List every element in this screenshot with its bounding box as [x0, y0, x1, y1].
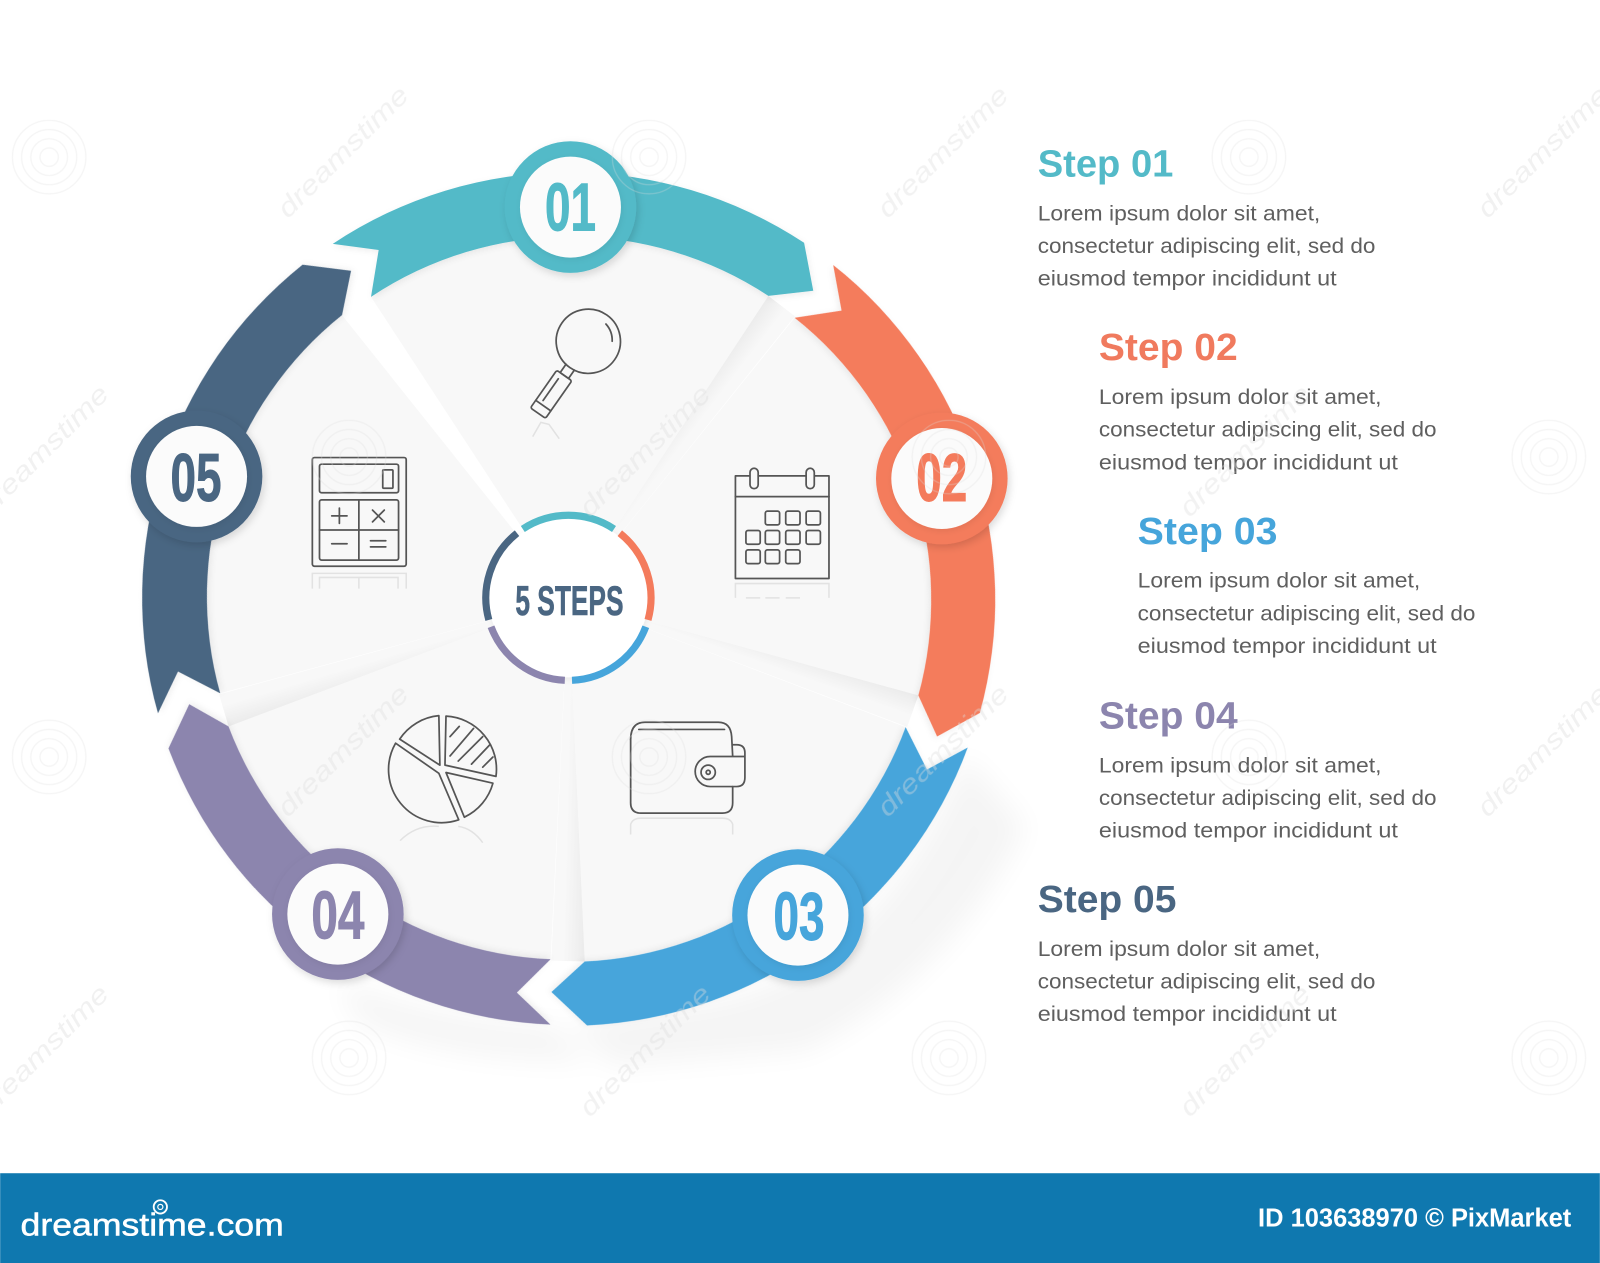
text block: step 02: Step 02: [1099, 326, 1238, 368]
text block: step 03: Lorem ipsum dolor sit amet,: [1138, 569, 1420, 593]
stock watermark: dreamstime: [271, 679, 415, 822]
footer bar: [0, 1173, 1600, 1263]
badge 05: 05: [171, 441, 222, 516]
text block: step 03: consectetur adipiscing elit, sed do: [1138, 601, 1475, 625]
text block: step 02: eiusmod tempor incididunt ut: [1099, 450, 1398, 474]
text block: step 04: Lorem ipsum dolor sit amet,: [1099, 753, 1382, 777]
inner pie: five light wedges: [163, 237, 975, 1009]
central hub: 5 steps: [476, 515, 661, 691]
text block: step 01: consectetur adipiscing elit, sed do: [1038, 234, 1375, 258]
text block: step 01: Step 01: [1038, 142, 1173, 184]
stock watermark: dreamstime: [871, 80, 1015, 224]
text block: step 02: [1099, 326, 1437, 474]
arrow segment 02: [783, 243, 1050, 738]
badge 02: [876, 413, 1008, 544]
text block: step 05: Step 05: [1038, 878, 1176, 920]
text block: step 04: eiusmod tempor incididunt ut: [1099, 819, 1398, 843]
text block: step 04: Step 04: [1099, 694, 1238, 736]
text block: step 01: Lorem ipsum dolor sit amet,: [1038, 201, 1320, 225]
arrow segment 01: [333, 172, 813, 297]
badge 03: 03: [773, 880, 824, 955]
icon: magnifying glass: [512, 296, 633, 439]
stock watermark: dreamstime: [573, 379, 717, 523]
text block: step 05: Lorem ipsum dolor sit amet,: [1038, 937, 1320, 961]
badge 02: 02: [916, 441, 967, 516]
stock watermark: dreamstime: [1173, 379, 1317, 523]
text block: step 03: Step 03: [1138, 510, 1277, 552]
text block: step 05: [1038, 878, 1375, 1026]
text block: step 04: [1099, 694, 1437, 843]
icon: calendar: [735, 468, 829, 598]
badge 04: 04: [311, 879, 365, 954]
text block: step 04: consectetur adipiscing elit, sed do: [1099, 786, 1437, 810]
stock watermark: dreamstime: [573, 979, 717, 1122]
text block: step 03: [1138, 510, 1475, 658]
text block: step 01: [1038, 142, 1375, 291]
text block: step 03: eiusmod tempor incididunt ut: [1138, 634, 1437, 658]
badge 01: [505, 141, 636, 273]
icon: wallet: [631, 722, 745, 835]
stock watermark: dreamstime: [271, 80, 415, 224]
arrow segment 05: [90, 234, 357, 730]
arrow segment 04: [120, 699, 582, 1082]
long soft shadow of the circle: [337, 755, 1025, 1066]
text block: step 01: eiusmod tempor incididunt ut: [1038, 267, 1337, 291]
stock watermark: dreamstime: [1471, 679, 1600, 822]
central hub: 5 steps: 5 STEPS: [515, 577, 624, 624]
footer bar: dreamstime.com: [21, 1206, 284, 1242]
badge 04: [272, 848, 404, 980]
panel: circular diagram: [90, 141, 1050, 1088]
text block: step 02: Lorem ipsum dolor sit amet,: [1099, 385, 1382, 409]
arrow segment 03: [548, 705, 1010, 1088]
stock watermark: dreamstime: [1471, 80, 1600, 224]
stock watermark: dreamstime: [871, 679, 1015, 822]
badge 05: [131, 411, 262, 542]
badge 03: [732, 849, 864, 981]
text block: step 05: eiusmod tempor incididunt ut: [1038, 1002, 1337, 1026]
text block: step 05: consectetur adipiscing elit, sed do: [1038, 970, 1375, 994]
icon: calculator: [312, 458, 406, 589]
badge 01: 01: [545, 171, 596, 246]
stock watermark: dreamstime: [1173, 979, 1317, 1122]
icon: pie chart: [389, 716, 496, 843]
text block: step 02: consectetur adipiscing elit, sed do: [1099, 418, 1437, 442]
wedge separator shading: [207, 290, 927, 977]
footer bar: ID 103638970 © PixMarket: [1258, 1204, 1572, 1232]
